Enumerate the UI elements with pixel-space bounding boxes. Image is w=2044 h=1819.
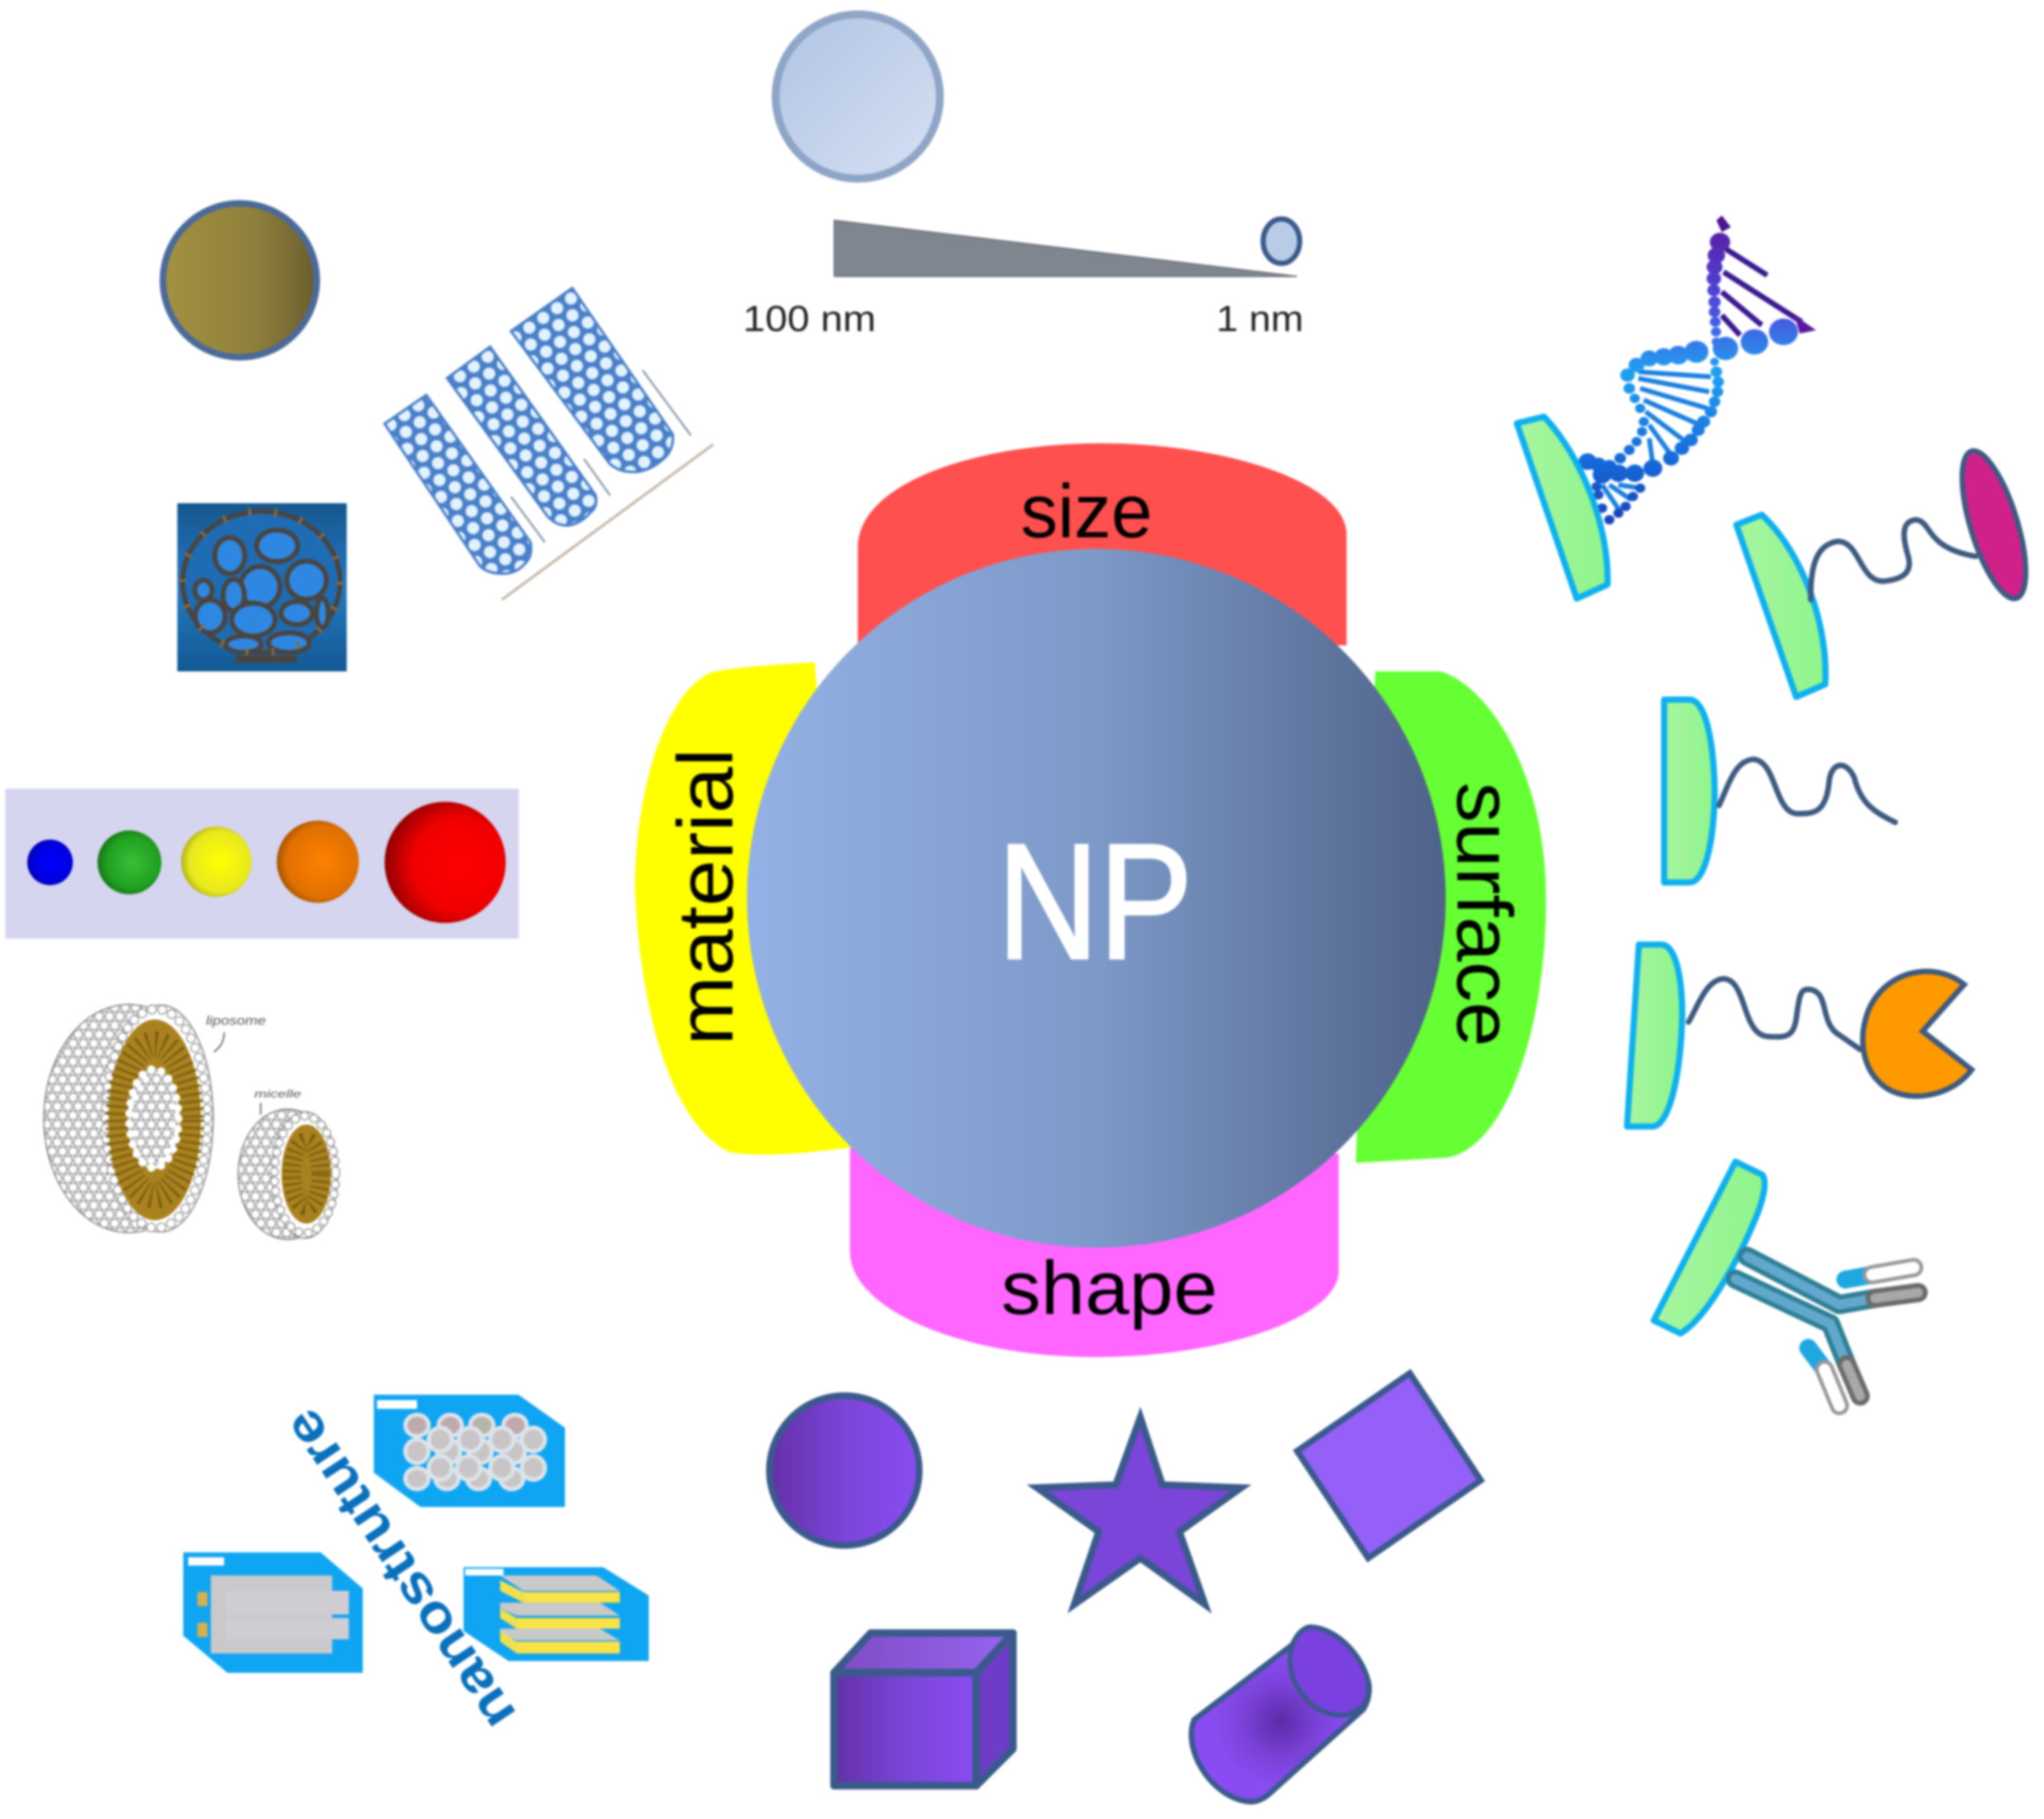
icon: cube (834, 1633, 1013, 1785)
icon: diamond (1297, 1373, 1481, 1558)
nanostructure panel: lamellae (464, 1567, 649, 1661)
label: material: material (663, 749, 750, 1046)
material examples: carbon nanotubes (384, 288, 713, 600)
surface: linker with magenta ligand (1737, 445, 2039, 697)
surface: antibody (1654, 1162, 1918, 1406)
small particle (1263, 219, 1300, 263)
icon: star (1037, 1417, 1241, 1604)
material examples: fullerene (177, 503, 346, 671)
label: 100 nm: 100 nm (743, 299, 876, 340)
tab: surface (1356, 671, 1546, 1163)
liposome label: liposome (206, 1013, 266, 1027)
surface: linker with orange receptor (1627, 945, 1971, 1127)
nanostructure panel: cylinders (183, 1552, 363, 1673)
icon: DNA helix (1579, 215, 1816, 524)
material examples: sphere series (5, 788, 519, 939)
icon: shell (1517, 416, 1608, 598)
icon: sphere (769, 1396, 919, 1545)
nanostructure examples (183, 1395, 649, 1741)
nanostructure label: nanostruture (271, 1398, 527, 1741)
size scale panel (743, 14, 1304, 340)
NP label: NP (997, 809, 1193, 993)
material examples: micelle (238, 1088, 338, 1239)
label: shape: shape (1001, 1246, 1217, 1330)
size wedge (834, 220, 1297, 277)
micelle label: micelle (254, 1088, 301, 1101)
label: surface: surface (1440, 782, 1527, 1047)
nanostructure panel: spheres (374, 1395, 565, 1507)
tab: shape (850, 1147, 1339, 1357)
large particle (775, 14, 940, 178)
shape examples (769, 1373, 1481, 1802)
label: 1 nm: 1 nm (1217, 299, 1304, 340)
surface: DNA functionalised (1517, 215, 1816, 598)
surface: linker only (1664, 700, 1895, 882)
material examples: liposome (44, 1005, 266, 1232)
material examples: solid particle (163, 203, 317, 357)
label: size: size (1021, 469, 1152, 554)
central NP circle (747, 549, 1446, 1247)
tab: size (858, 443, 1347, 645)
tab: material (635, 662, 854, 1155)
icon: cylinder (1191, 1627, 1369, 1802)
